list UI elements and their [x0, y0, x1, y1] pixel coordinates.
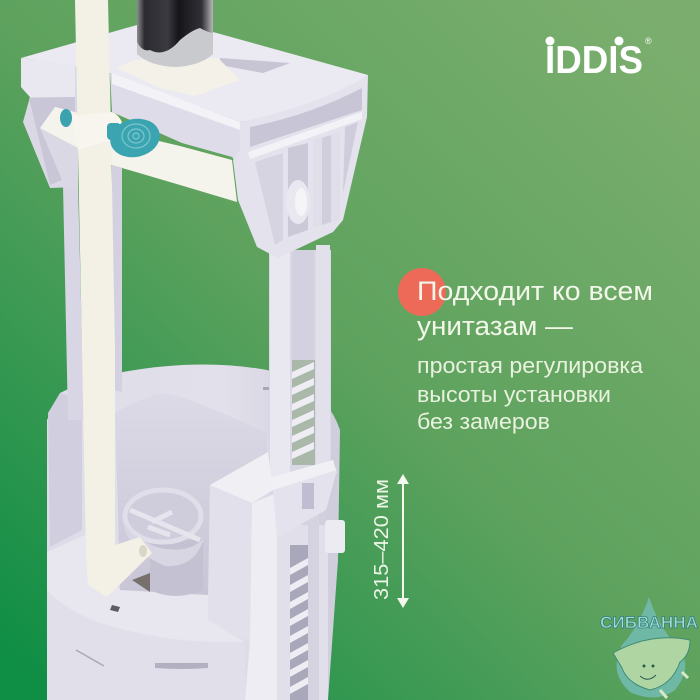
sleeve clamp: [268, 460, 337, 538]
product: flush valve mechanism: [21, 0, 368, 700]
cap front face: [21, 58, 75, 97]
cap front face highlight: [112, 73, 240, 130]
left leg: [63, 165, 122, 420]
logo: iddis: ®: [645, 36, 652, 46]
cream inner platform: [117, 58, 240, 96]
right bracket: [233, 75, 368, 258]
cap front face right: [110, 73, 240, 168]
lower right rack: [277, 510, 345, 700]
watermark: Сибванна: СИБВАННА: [600, 613, 698, 632]
body text: [417, 353, 644, 434]
cap top surface: [21, 25, 368, 122]
adjustment bar: [40, 107, 237, 202]
logo: iddis: IDDIS: [545, 39, 643, 82]
heading: Подходит ко всем: [417, 276, 653, 306]
left bracket post on body: [48, 393, 82, 547]
heading: унитазам —: [417, 311, 573, 341]
white scale rack with elbow: [72, 0, 152, 597]
height arrow: [397, 474, 409, 608]
rectangular opening in cap: [220, 58, 290, 73]
cylinder body: [47, 364, 340, 700]
left inner shade: [29, 97, 75, 185]
left bracket: [21, 60, 78, 188]
body text: без замеров: [417, 409, 550, 434]
body text: высоты установки: [417, 382, 611, 407]
chrome cylinder: [137, 0, 213, 67]
right front box: [208, 452, 277, 700]
watermark: Сибванна: [600, 597, 698, 698]
right leg with slotted rail: [269, 245, 331, 490]
heading: [417, 276, 653, 341]
float ring: [123, 490, 204, 596]
red accent circle: [398, 268, 446, 316]
height dimension label: 315–420 мм: [371, 479, 393, 600]
body text: простая регулировка: [417, 353, 644, 378]
teal knob: [60, 109, 163, 162]
